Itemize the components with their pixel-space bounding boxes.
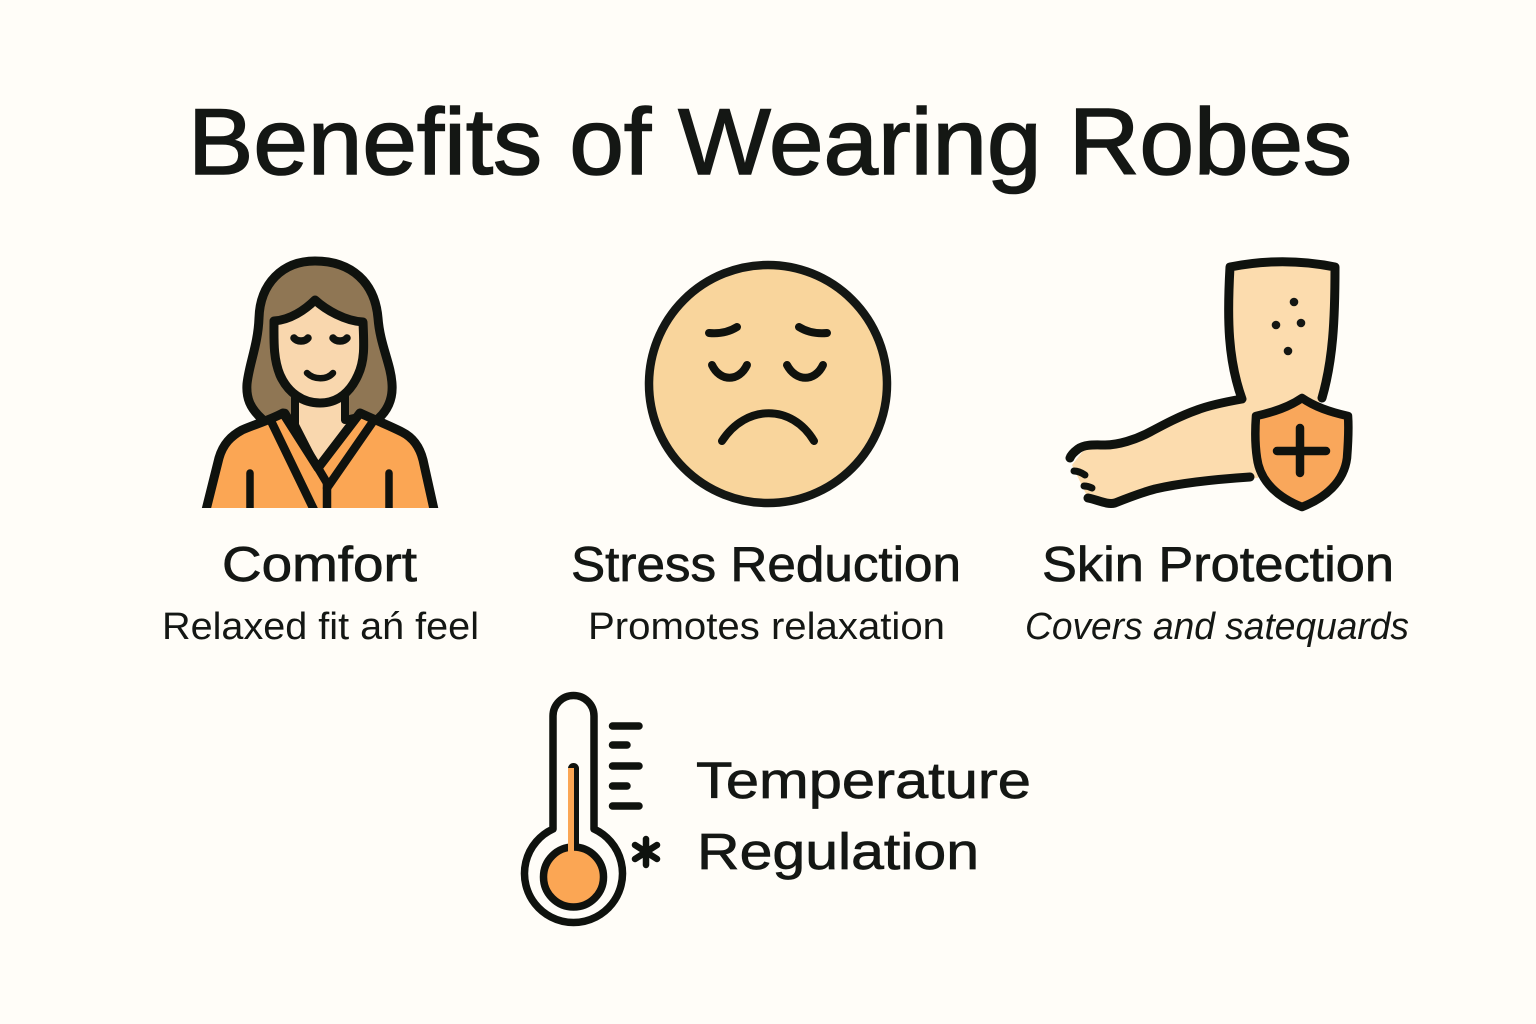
- icon: face: [649, 265, 887, 503]
- text: comfort description: Relaxed fit ań feel: [162, 606, 479, 648]
- text: skin description: Covers and satequards: [1025, 606, 1409, 648]
- text: stress description: Promotes relaxation: [588, 606, 945, 648]
- icon: shield: [1255, 398, 1348, 507]
- icon: asterisk: [635, 839, 657, 865]
- heading: temperature regulation: Regulation: [697, 823, 979, 880]
- panel: temperature regulation: [524, 695, 1031, 923]
- title: Benefits of Wearing Robes: [188, 89, 1352, 194]
- panel: stress reduction: [571, 265, 961, 648]
- heading: skin protection: Skin Protection: [1042, 538, 1394, 592]
- panel: comfort: [162, 261, 479, 648]
- heading: comfort: Comfort: [222, 538, 417, 592]
- icon: arm with shield: [1070, 262, 1348, 507]
- heading: temperature regulation: [696, 752, 1031, 880]
- panel: skin protection: [1025, 262, 1409, 648]
- icon: thermometer: [524, 695, 657, 923]
- icon: woman in robe: [205, 261, 435, 514]
- heading: temperature regulation: Temperature: [696, 752, 1031, 809]
- heading: stress reduction: Stress Reduction: [571, 538, 961, 592]
